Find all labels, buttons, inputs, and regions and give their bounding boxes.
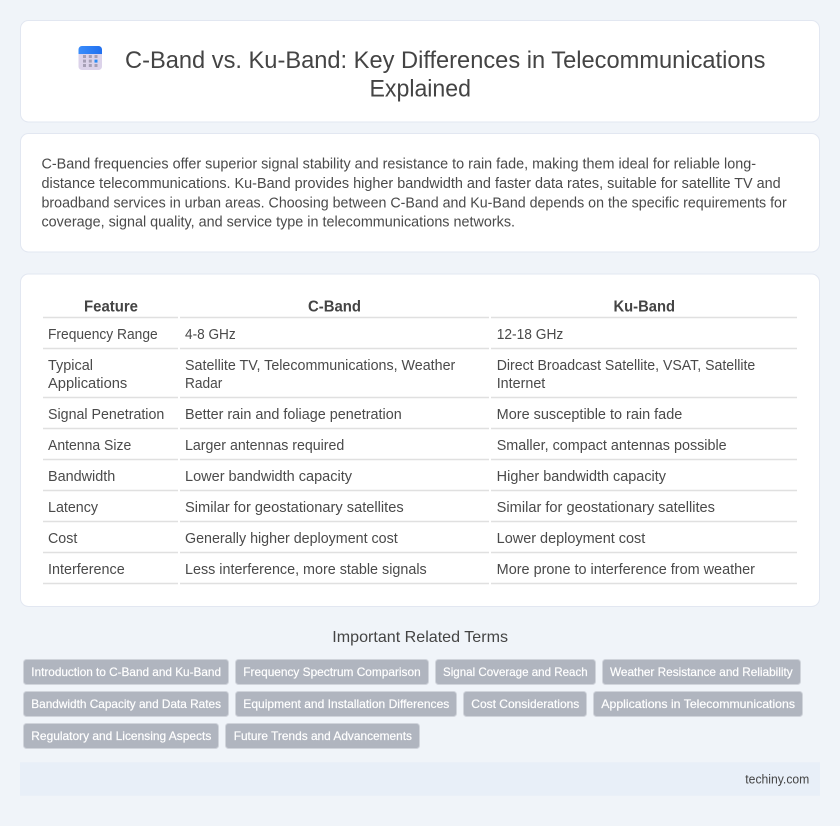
row: signal penetration: More susceptible to rain fade xyxy=(497,407,682,423)
row: antenna size: Antenna Size xyxy=(48,438,131,454)
row: interference: Less interference, more stable signals xyxy=(185,562,427,578)
footer xyxy=(20,762,820,796)
row: frequency range xyxy=(48,327,563,343)
row: latency: Latency xyxy=(48,500,99,516)
row: typical applications: Typical xyxy=(48,358,93,374)
row: signal penetration xyxy=(48,407,682,423)
row: cost xyxy=(48,531,645,547)
title xyxy=(125,47,766,103)
tag: Signal Coverage and Reach xyxy=(443,665,588,679)
table header: Ku-Band xyxy=(614,299,675,316)
text block: introduction paragraph: C-Band frequencies offer superior signal stability and resistance to rain fade, making them ideal for reliable long- xyxy=(42,156,756,172)
tag: Cost Considerations xyxy=(471,697,579,711)
tag xyxy=(24,692,228,716)
tag xyxy=(594,692,802,716)
table header: C-Band xyxy=(308,299,361,316)
row: interference xyxy=(48,562,755,578)
table header: Feature xyxy=(84,299,138,316)
tag: Bandwidth Capacity and Data Rates xyxy=(31,697,221,711)
heading: important related terms: Important Related Terms xyxy=(332,629,508,646)
row: interference: More prone to interference from weather xyxy=(497,562,755,578)
row: frequency range: Frequency Range xyxy=(48,327,158,343)
row: bandwidth: Bandwidth xyxy=(48,469,115,485)
row: interference: Interference xyxy=(48,562,125,578)
tag: Introduction to C-Band and Ku-Band xyxy=(31,665,221,679)
panel: comparison table xyxy=(20,274,820,606)
table header xyxy=(84,299,675,316)
row: frequency range: 4-8 GHz xyxy=(185,327,236,343)
row: bandwidth: Lower bandwidth capacity xyxy=(185,469,353,485)
title: C-Band vs. Ku-Band: Key Differences in Telecommunications xyxy=(125,47,766,74)
row: typical applications xyxy=(48,358,755,392)
footer: techiny.com xyxy=(745,772,809,786)
tag xyxy=(602,660,800,684)
tag: Applications in Telecommunications xyxy=(601,697,795,711)
tag: Weather Resistance and Reliability xyxy=(610,665,793,679)
panel: introduction xyxy=(20,134,820,252)
tag: Future Trends and Advancements xyxy=(234,729,412,743)
panel: related term tags xyxy=(24,660,802,748)
panel: header xyxy=(20,20,820,122)
row: cost: Lower deployment cost xyxy=(497,531,645,547)
tag: Frequency Spectrum Comparison xyxy=(243,665,421,679)
tag xyxy=(236,692,456,716)
tag xyxy=(436,660,596,684)
tag: Equipment and Installation Differences xyxy=(243,697,449,711)
tag xyxy=(226,724,420,748)
row: latency xyxy=(48,500,715,516)
row: typical applications: Radar xyxy=(185,376,222,392)
row: cost: Cost xyxy=(48,531,77,547)
tag xyxy=(24,724,218,748)
row: latency: Similar for geostationary satellites xyxy=(497,500,715,516)
row: typical applications: Satellite TV, Telecommunications, Weather xyxy=(185,358,456,374)
row: typical applications: Applications xyxy=(48,376,127,392)
row: antenna size: Larger antennas required xyxy=(185,438,344,454)
row: antenna size: Smaller, compact antennas possible xyxy=(497,438,727,454)
row: antenna size xyxy=(48,438,727,454)
tag: Regulatory and Licensing Aspects xyxy=(31,729,211,743)
text block: introduction paragraph: broadband services in urban areas. Choosing between C-Band and Ku-Band depends on the specific requirements for xyxy=(42,195,787,211)
row: cost: Generally higher deployment cost xyxy=(185,531,398,547)
row: bandwidth xyxy=(48,469,667,485)
title: Explained xyxy=(370,76,471,103)
tag xyxy=(24,660,228,684)
row: signal penetration: Better rain and foliage penetration xyxy=(185,407,402,423)
row: bandwidth: Higher bandwidth capacity xyxy=(497,469,667,485)
tag xyxy=(464,692,586,716)
row: latency: Similar for geostationary satellites xyxy=(185,500,404,516)
tag xyxy=(236,660,428,684)
text block: introduction paragraph xyxy=(42,156,787,231)
row: typical applications: Direct Broadcast Satellite, VSAT, Satellite xyxy=(497,358,755,374)
text block: introduction paragraph: distance telecommunications. Ku-Band provides higher bandwidth and faster data rates, suitable for satellite TV and xyxy=(42,176,781,192)
row: typical applications: Internet xyxy=(497,376,545,392)
row: signal penetration: Signal Penetration xyxy=(48,407,164,423)
icon: calendar xyxy=(78,46,102,70)
text block: introduction paragraph: coverage, signal quality, and service type in telecommunications networks. xyxy=(42,215,515,231)
row: frequency range: 12-18 GHz xyxy=(497,327,563,343)
